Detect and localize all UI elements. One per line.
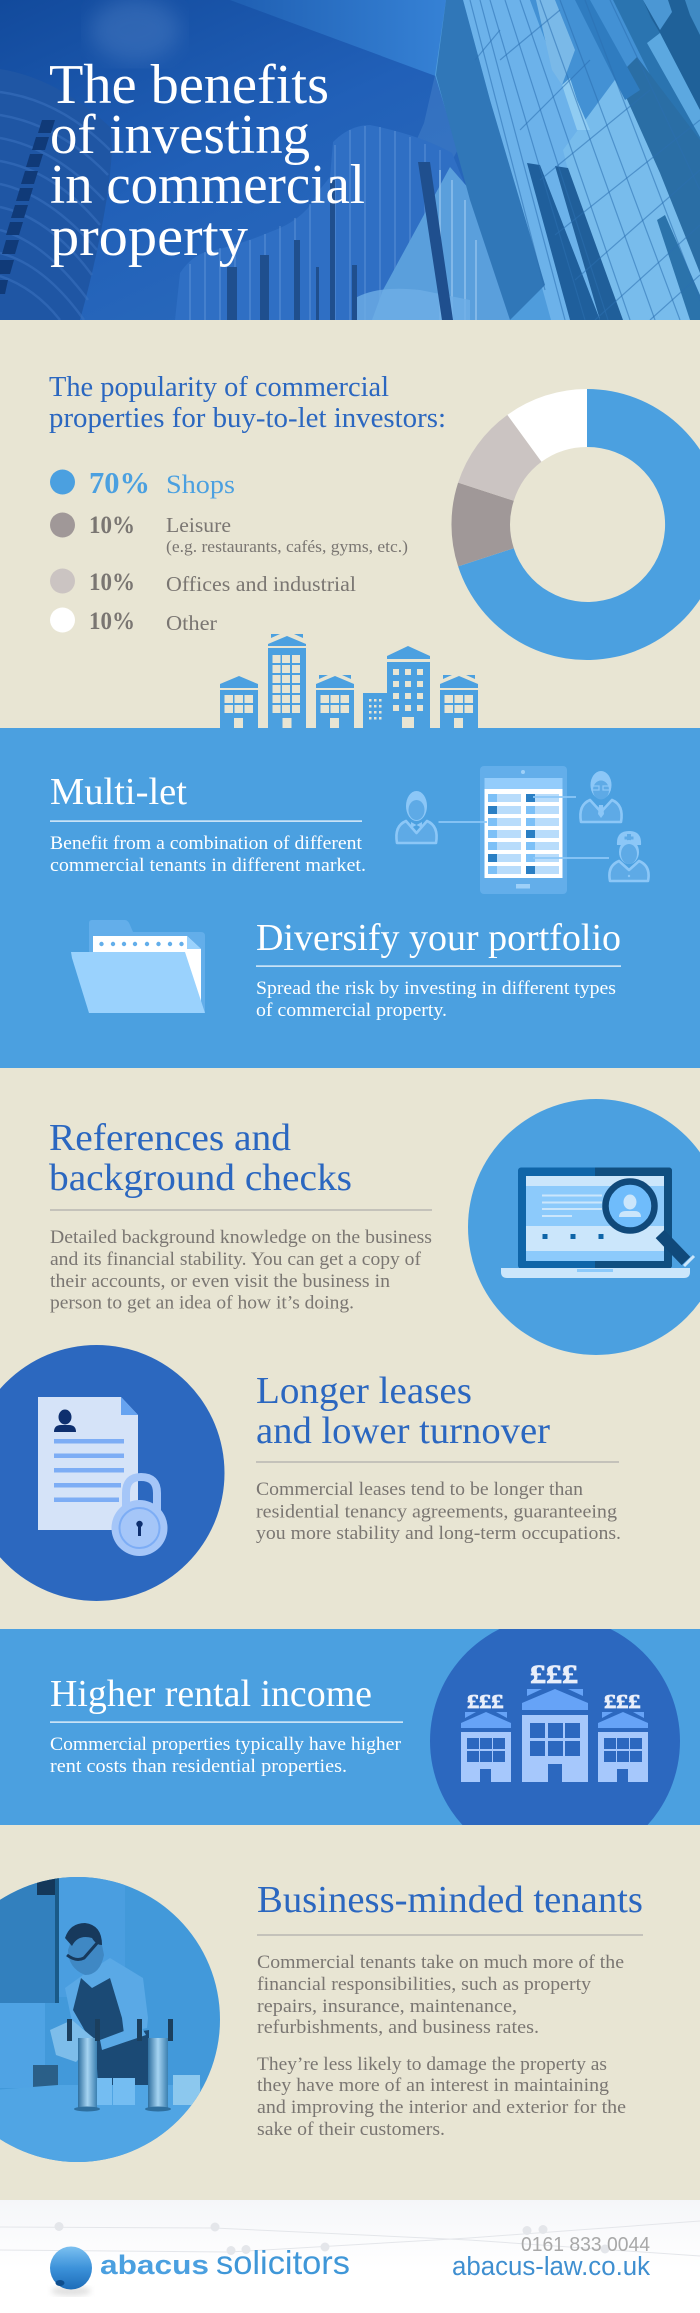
panel: higher rental income [0, 1629, 700, 1825]
legend item: shops: 70% [89, 465, 150, 500]
icon: tenant with bow tie [396, 791, 437, 843]
donut chart [451, 389, 700, 660]
text: longer leases heading: Longer leases [256, 1370, 472, 1412]
text: longer leases body: Commercial leases tend to be longer than [256, 1479, 584, 1500]
pound signs: £££ [467, 1691, 504, 1713]
title: of investing [50, 104, 310, 166]
title: The benefits [49, 54, 329, 116]
logo: abacus solicitors: abacus [100, 2250, 209, 2280]
text: references heading [49, 1117, 352, 1199]
panel: longer leases [0, 1345, 621, 1601]
photo: barista in duotone blue [0, 1877, 220, 2162]
icon: row of buildings [220, 634, 478, 728]
block: multi-let text: Benefit from a combination of different [50, 833, 363, 854]
right building [598, 1712, 648, 1782]
hero background photo of glass towers [0, 0, 700, 320]
text: business-minded heading: Business-minded tenants [257, 1879, 643, 1921]
text: references body [50, 1227, 432, 1314]
contact details: abacus-law.co.uk [452, 2253, 650, 2281]
legend [50, 465, 408, 635]
pound signs [467, 1660, 640, 1713]
text: references body: and its financial stability. You can get a copy of [50, 1249, 422, 1270]
text: references body: Detailed background knowledge on the business [50, 1227, 432, 1248]
block: higher rental income text: Higher rental income [50, 1673, 372, 1715]
centre building [522, 1689, 588, 1782]
text: longer leases body: you more stability and long-term occupations. [256, 1523, 621, 1544]
legend item: leisure: (e.g. restaurants, cafés, gyms, etc.) [166, 537, 408, 556]
legend item: offices and industrial: 10% [89, 569, 135, 596]
panel: business-minded tenants [0, 1877, 643, 2162]
logo: abacus solicitors [50, 2244, 350, 2296]
icon: nurse tenant [609, 831, 649, 881]
legend item: other [50, 608, 217, 635]
legend item: shops: Shops [166, 469, 235, 499]
block: diversify text: of commercial property. [256, 1000, 447, 1021]
heading: popularity [49, 371, 446, 434]
block: higher rental income text: rent costs than residential properties. [50, 1756, 347, 1777]
title: in commercial [50, 154, 365, 216]
logo: abacus solicitors: solicitors [216, 2244, 350, 2281]
text: business-minded body [257, 1952, 626, 2140]
left building [461, 1712, 511, 1782]
legend item: leisure: 10% [89, 512, 135, 539]
text: references body: person to get an idea of how it’s doing. [50, 1292, 354, 1314]
text: business-minded body: repairs, insurance, maintenance, [257, 1996, 517, 2017]
contact details [452, 2234, 650, 2281]
icon: document and padlock [0, 1345, 224, 1601]
title: property [50, 206, 248, 268]
legend item: offices and industrial: Offices and industrial [166, 572, 356, 596]
text: business-minded body: Commercial tenants take on much more of the [257, 1952, 624, 1973]
block: multi-let text: Multi-let [50, 771, 187, 813]
text: business-minded body: refurbishments, and business rates. [257, 2017, 539, 2038]
icon: laptop and magnifying glass [468, 1099, 700, 1355]
title [49, 54, 365, 268]
block: higher rental income text: Commercial properties typically have higher [50, 1734, 402, 1755]
legend item: shops [50, 465, 235, 500]
pound signs: £££ [530, 1660, 578, 1689]
contact details: 0161 833 0044 [521, 2234, 650, 2256]
panel: popularity of commercial properties [49, 371, 700, 728]
text: business-minded body: They’re less likely to damage the property as [257, 2054, 607, 2075]
legend item: leisure [50, 512, 408, 556]
block: diversify text: Diversify your portfolio [256, 917, 621, 959]
text: business-minded body: they have more of an interest in maintaining [257, 2075, 610, 2096]
text: longer leases body: residential tenancy agreements, guaranteeing [256, 1502, 618, 1522]
panel: multi-let and diversify band [0, 728, 700, 1068]
icon: folder [71, 920, 205, 1013]
text: references heading: References and [49, 1117, 291, 1159]
block: multi-let text: commercial tenants in different market. [50, 855, 366, 876]
panel: hero [0, 0, 700, 320]
text: business-minded body: sake of their customers. [257, 2119, 445, 2140]
heading: popularity: properties for buy-to-let investors: [49, 402, 446, 434]
right glass tower [435, 0, 650, 320]
legend item: leisure: Leisure [166, 513, 231, 537]
block: diversify text [256, 917, 621, 1021]
block: diversify text: Spread the risk by investing in different types [256, 978, 616, 999]
block: higher rental income text [50, 1673, 403, 1777]
pound signs: £££ [604, 1691, 640, 1713]
panel: footer [0, 2200, 700, 2313]
magnifying glass [606, 1182, 694, 1266]
legend item: offices and industrial [50, 568, 356, 596]
icon: tablet [480, 766, 567, 894]
legend item: other: 10% [89, 608, 135, 635]
text: longer leases heading: and lower turnover [256, 1410, 550, 1452]
text: references heading: background checks [49, 1157, 352, 1199]
padlock [112, 1477, 168, 1556]
icon: tenant with glasses [580, 771, 622, 822]
text: longer leases heading [256, 1370, 550, 1452]
text: business-minded body: and improving the interior and exterior for the [257, 2097, 626, 2118]
text: business-minded body: financial responsibilities, such as property [257, 1974, 592, 1995]
centre tower [175, 125, 464, 320]
connector lines [438, 797, 609, 858]
panel: references and background checks [49, 1099, 700, 1355]
heading: popularity: The popularity of commercial [49, 371, 389, 403]
text: longer leases body [256, 1479, 621, 1544]
text: references body: their accounts, or even visit the business in [50, 1271, 391, 1292]
legend item: other: Other [166, 611, 217, 635]
left tower [0, 69, 112, 320]
icon: tablet with tenants [396, 766, 649, 894]
icon: three buildings with pound signs [430, 1629, 680, 1825]
block: multi-let text [50, 771, 366, 876]
